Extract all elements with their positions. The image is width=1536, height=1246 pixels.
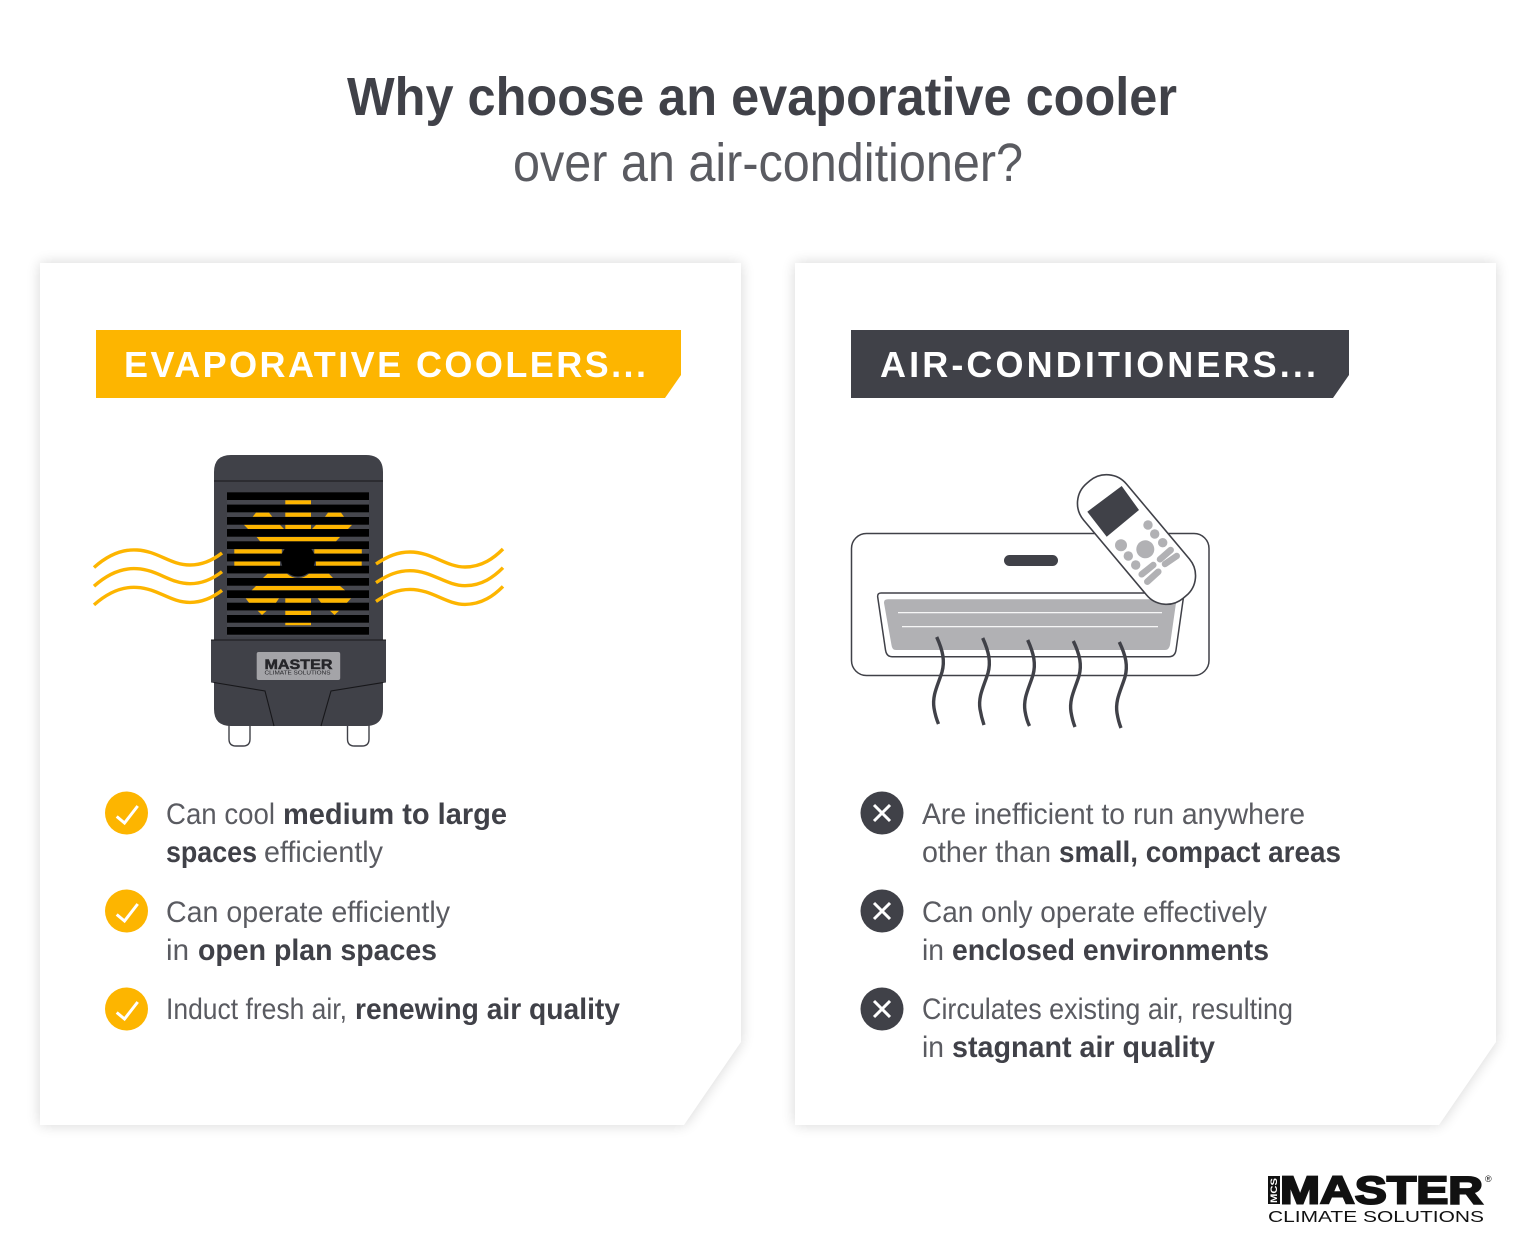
benefit list <box>105 792 620 1030</box>
drawback 2: Can only operate effectively <box>922 896 1267 929</box>
benefit 1: medium to large <box>283 798 507 831</box>
cold air streams <box>934 637 1126 728</box>
benefit 2: open plan spaces <box>198 934 437 967</box>
benefit 1: efficiently <box>264 836 383 869</box>
benefit 3: Induct fresh air, <box>166 993 347 1026</box>
drawback 1: Are inefficient to run anywhere <box>922 798 1305 831</box>
title <box>347 67 1177 193</box>
status display <box>1004 555 1058 566</box>
logo badge: CLIMATE SOLUTIONS <box>264 670 331 676</box>
fan blades <box>234 500 362 625</box>
air waves left <box>94 550 222 605</box>
panel: evaporative coolers <box>40 263 741 1125</box>
benefit 2: in <box>166 934 189 967</box>
icon: evaporative cooler unit <box>94 455 503 746</box>
benefit 1: Can cool <box>166 798 275 831</box>
drawback 3 <box>860 988 1293 1064</box>
drawback 2 <box>860 890 1269 967</box>
logo badge: MASTER <box>264 656 332 672</box>
drawback 2: enclosed environments <box>952 934 1269 967</box>
drawback 3: stagnant air quality <box>952 1031 1215 1064</box>
cooler base <box>211 640 386 726</box>
benefit 1: spaces <box>166 836 257 869</box>
drawback 3: Circulates existing air, resulting <box>922 993 1293 1026</box>
feet <box>229 724 369 746</box>
benefit 2 <box>105 890 450 967</box>
logo: Master Climate Solutions: MCS <box>1269 1178 1279 1203</box>
logo: Master Climate Solutions: CLIMATE SOLUTIONS <box>1268 1209 1484 1226</box>
benefit 1 <box>105 792 507 869</box>
air waves right <box>376 549 503 604</box>
drawback 3: in <box>922 1031 944 1064</box>
benefit 2: Can operate efficiently <box>166 896 450 929</box>
remote control <box>1067 464 1206 615</box>
drawback 1: small, compact areas <box>1059 836 1341 869</box>
heading banner: air-conditioners: AIR-CONDITIONERS... <box>880 344 1316 385</box>
title: Why choose an evaporative cooler <box>347 67 1177 127</box>
panel: air-conditioners <box>795 263 1496 1125</box>
logo: Master Climate Solutions: ® <box>1485 1174 1492 1184</box>
benefit 3: renewing air quality <box>355 993 620 1026</box>
heading banner: evaporative coolers: EVAPORATIVE COOLERS... <box>124 344 646 385</box>
logo: Master Climate Solutions <box>1268 1170 1492 1226</box>
cooler body <box>211 455 386 726</box>
logo: Master Climate Solutions: MASTER <box>1280 1170 1483 1212</box>
logo badge <box>257 652 340 680</box>
fan hub <box>281 542 315 576</box>
drawback 1 <box>860 792 1341 869</box>
benefit 3 <box>105 988 620 1030</box>
drawback 1: other than <box>922 836 1051 869</box>
heading banner: air-conditioners <box>851 330 1349 398</box>
air vent <box>878 593 1184 657</box>
drawback list <box>860 792 1341 1064</box>
indoor unit <box>852 534 1209 676</box>
icon: wall air-conditioner <box>852 464 1209 728</box>
fan louvers <box>227 492 369 636</box>
drawback 2: in <box>922 934 944 967</box>
title: over an air-conditioner? <box>513 133 1023 193</box>
heading banner: evaporative coolers <box>96 330 681 398</box>
